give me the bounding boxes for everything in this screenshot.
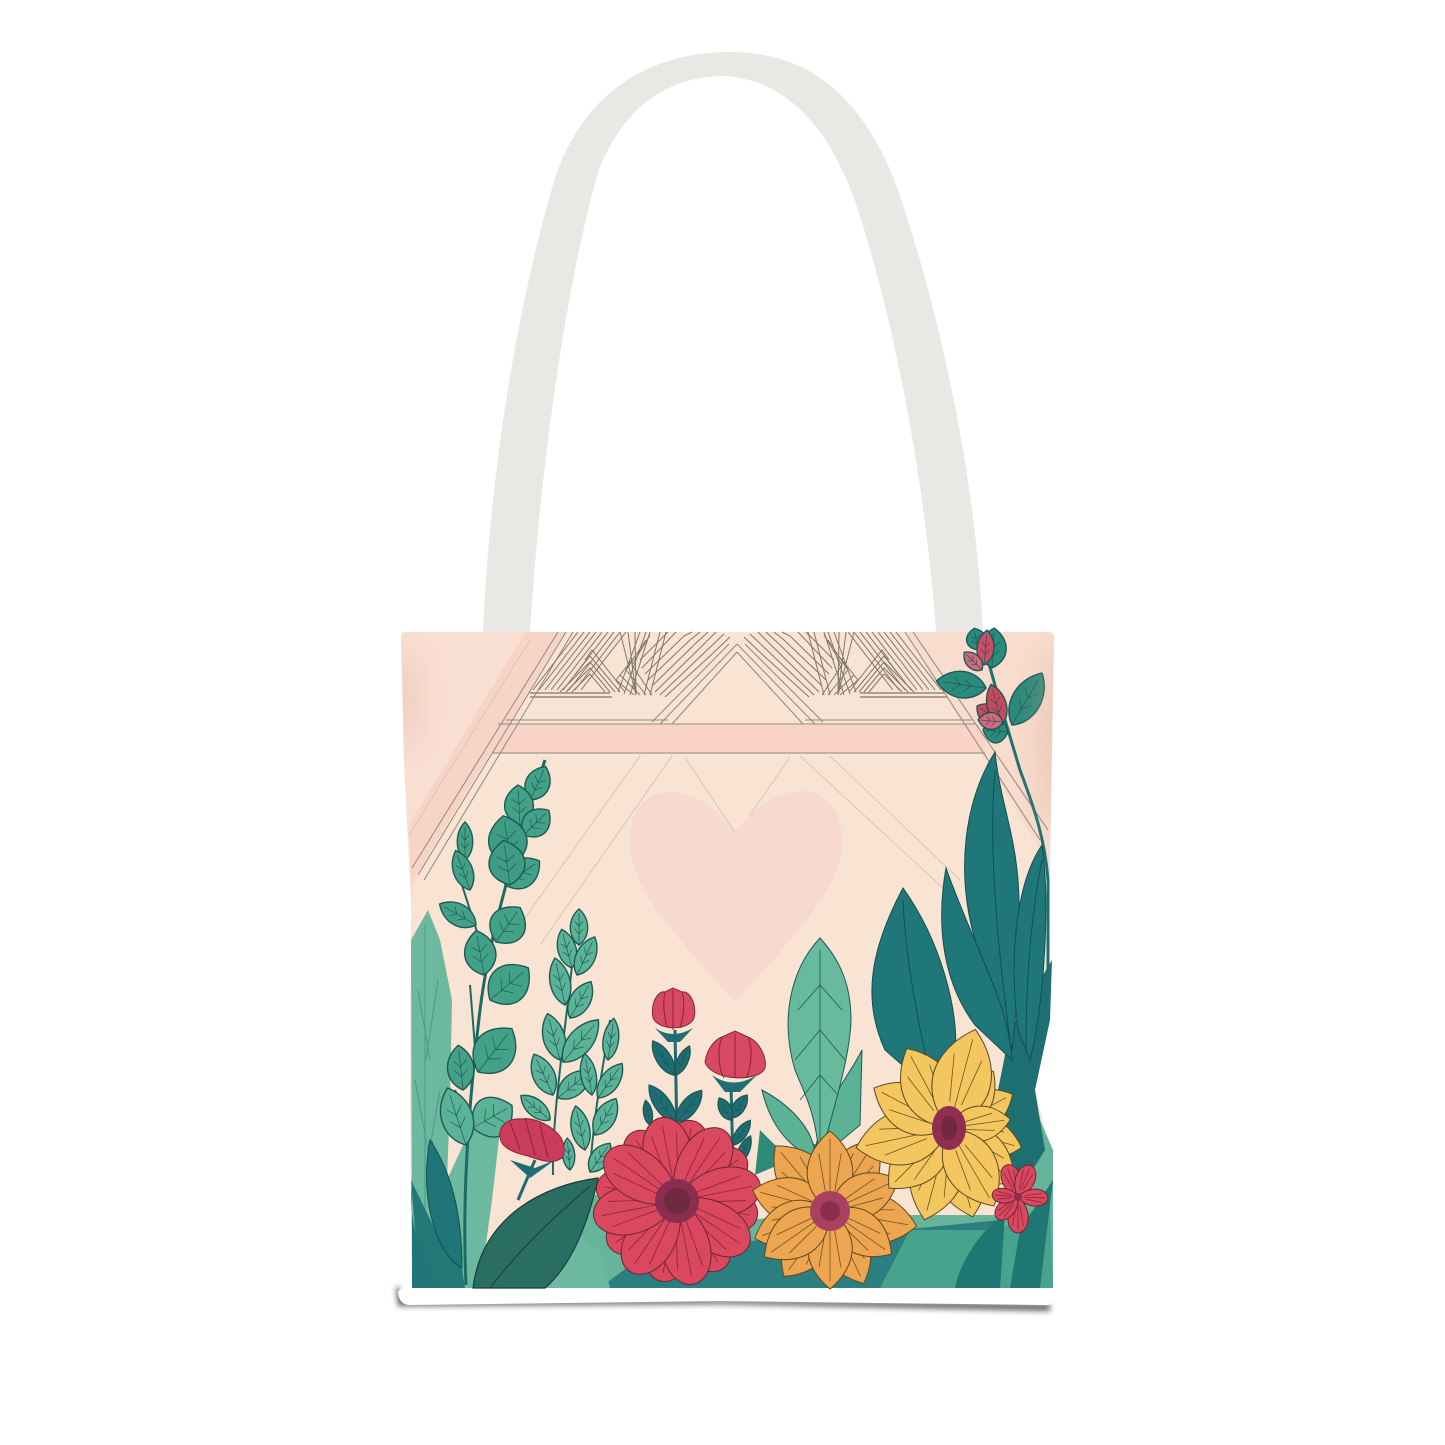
top right sprig [935,627,1054,1010]
line art: triangles [412,632,1048,880]
teal floor [600,1140,1010,1288]
pink corner left [401,632,565,900]
big teal leaves right [872,752,1052,1190]
red tuft [500,1118,564,1162]
flower: yellow [850,1022,1030,1227]
bud one [652,988,695,1030]
pink corner right [905,632,1054,870]
bottom foliage mass [411,910,1053,1288]
white bag body [398,632,1056,1305]
big leaf [872,888,956,1085]
ground shadow [396,1285,1050,1311]
leaf right [1014,845,1046,1060]
mint grass left [411,910,500,1288]
dark mass right [990,960,1052,1190]
printed panel [401,632,1054,1288]
teal blades bottom left [411,1140,462,1288]
tall left sprig [433,760,558,1285]
flower: red [589,1113,765,1289]
flower: small red [991,1162,1048,1233]
second sprig [515,909,630,1177]
bud two [705,1031,765,1078]
bag folds shading [402,660,1054,830]
hatch right [744,632,941,697]
flower: orange [747,1127,921,1293]
handle [483,52,983,632]
tote bag illustration [392,52,1054,1316]
hatch left [533,632,730,697]
mint centre leaves [762,938,862,1160]
heart [630,791,842,1002]
mint floor [470,1120,1053,1288]
dark green large leaf [473,1178,598,1288]
leaf tall centre [965,752,1020,1050]
pink horizontal band [490,725,985,753]
buds with teal stems [500,988,765,1200]
print background [401,632,1054,1288]
faint lower lines [409,640,960,945]
leaf lower left [942,868,1012,1060]
pink diagonal band left [409,632,565,885]
